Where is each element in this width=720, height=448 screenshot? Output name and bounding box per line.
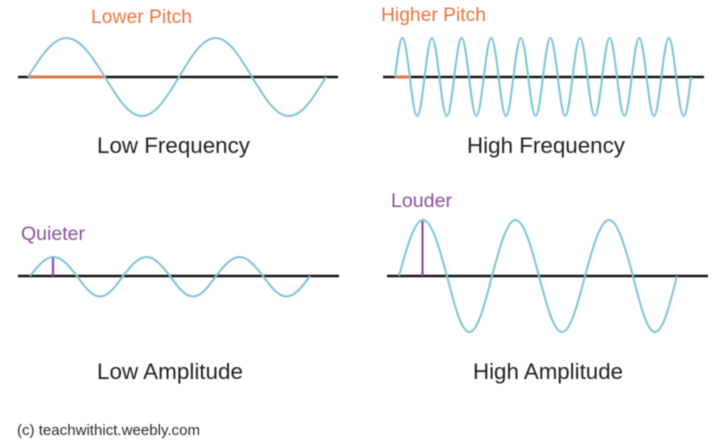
panel: high frequency bbox=[381, 5, 704, 158]
panel: low amplitude bbox=[18, 224, 339, 384]
panel: high amplitude bbox=[387, 191, 708, 384]
heading: low frequency: Low Frequency bbox=[97, 133, 251, 158]
marker: small amplitude height bbox=[52, 256, 54, 276]
marker: large amplitude height bbox=[421, 220, 424, 276]
heading: high amplitude: High Amplitude bbox=[473, 359, 623, 384]
marker: one half wave in orange bbox=[395, 76, 410, 78]
axis line: high frequency bbox=[383, 76, 704, 78]
wave: high frequency sine bbox=[395, 38, 691, 116]
heading: low amplitude: Low Amplitude bbox=[97, 359, 243, 384]
panel: low frequency bbox=[18, 7, 338, 158]
label: louder: Louder bbox=[391, 191, 453, 212]
wave: low amplitude sine bbox=[30, 257, 310, 296]
label: lower pitch: Lower Pitch bbox=[91, 7, 192, 28]
label: quieter: Quieter bbox=[21, 224, 86, 245]
marker: one half wave in orange bbox=[28, 76, 105, 78]
label: higher pitch: Higher Pitch bbox=[381, 5, 486, 26]
wave: low frequency sine bbox=[28, 38, 326, 116]
axis line: low amplitude bbox=[18, 275, 339, 277]
credit line: (c) teachwithict.weebly.com bbox=[17, 422, 200, 439]
wave: high amplitude sine bbox=[399, 220, 677, 332]
axis line: low frequency bbox=[18, 76, 338, 78]
axis line: high amplitude bbox=[387, 275, 708, 277]
heading: high frequency: High Frequency bbox=[467, 133, 626, 158]
